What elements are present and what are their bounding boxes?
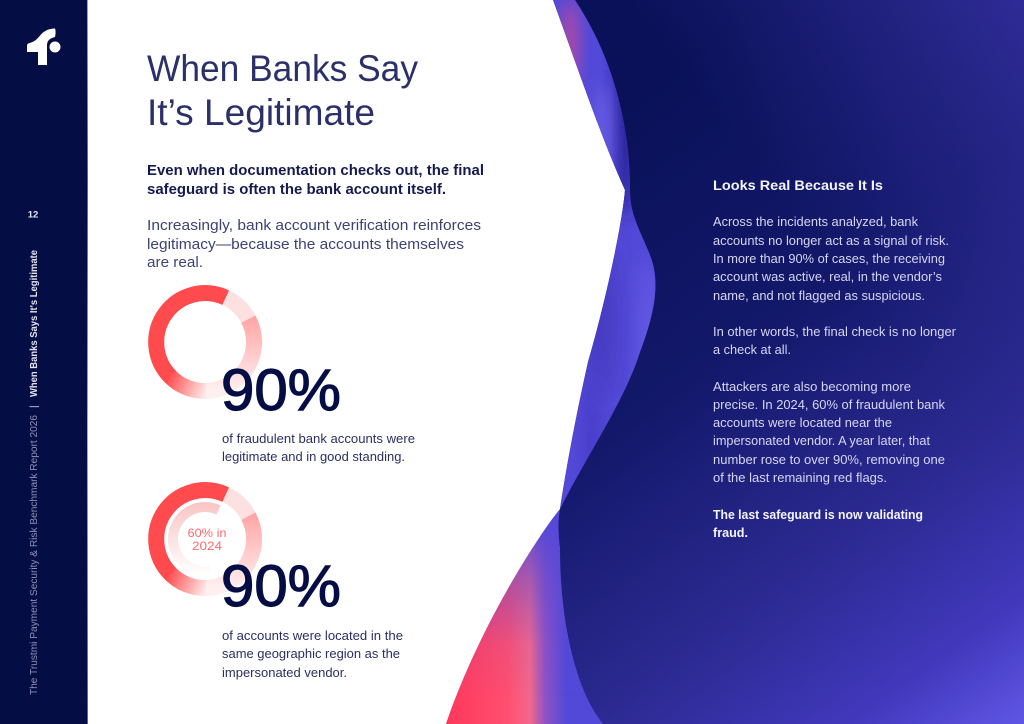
right panel paragraph 3: number rose to over 90%, removing one xyxy=(713,453,945,467)
donut centre label: 60% in xyxy=(188,526,226,540)
title: When Banks Say xyxy=(147,48,418,89)
lead statement: safeguard is often the bank account itself. xyxy=(147,182,446,198)
right panel paragraph 2 xyxy=(713,325,956,357)
right panel conclusion: The last safeguard is now validating xyxy=(713,508,923,522)
title xyxy=(147,48,418,133)
intro paragraph: are real. xyxy=(147,255,203,271)
stat description: of accounts were located in the xyxy=(222,629,403,643)
right panel paragraph 1: name, and not flagged as suspicious. xyxy=(713,289,925,303)
sidebar running title xyxy=(29,250,40,695)
right panel paragraph 3 xyxy=(713,380,946,485)
sidebar running title: The Trustmi Payment Security & Risk Benchmark Report 2026 xyxy=(29,415,40,695)
right panel paragraph 1: accounts no longer act as a signal of risk. xyxy=(713,234,949,248)
right panel paragraph 3: Attackers are also becoming more xyxy=(713,380,911,394)
flowing ribbon wave xyxy=(446,0,656,724)
stat description xyxy=(222,432,415,464)
donut centre label xyxy=(188,526,226,553)
right panel paragraph 1: account was active, real, in the vendor’s xyxy=(713,270,942,284)
panel: sidebar xyxy=(0,0,88,724)
intro paragraph xyxy=(147,218,481,271)
stat description: of fraudulent bank accounts were xyxy=(222,432,415,446)
right panel paragraph 3: precise. In 2024, 60% of fraudulent bank xyxy=(713,398,946,412)
lead statement xyxy=(147,163,484,198)
right panel paragraph 1 xyxy=(713,215,949,303)
intro paragraph: Increasingly, bank account verification reinforces xyxy=(147,218,481,234)
right panel paragraph 3: accounts were located near the xyxy=(713,416,892,430)
sidebar running title: | xyxy=(29,405,40,408)
donut centre label: 2024 xyxy=(192,539,222,553)
white content area xyxy=(88,0,625,724)
stat description xyxy=(222,629,403,680)
sidebar running title: When Banks Says It's Legitimate xyxy=(29,250,40,397)
stat: 90%: 90% xyxy=(221,554,341,619)
right panel paragraph 3: impersonated vendor. A year later, that xyxy=(713,434,931,448)
right panel paragraph 3: of the last remaining red flags. xyxy=(713,471,887,485)
right panel paragraph 1: In more than 90% of cases, the receiving xyxy=(713,252,945,266)
stat: 90%: 90% xyxy=(221,358,341,423)
stat description: same geographic region as the xyxy=(222,647,400,661)
right panel conclusion xyxy=(713,508,923,540)
page number: 12 xyxy=(28,210,38,220)
intro paragraph: legitimacy—because the accounts themselves xyxy=(147,237,464,253)
donut chart: 90% same region, 60% in 2024 xyxy=(156,490,254,588)
right panel conclusion: fraud. xyxy=(713,526,748,540)
lead statement: Even when documentation checks out, the final xyxy=(147,163,484,179)
donut chart: 90% legitimate accounts xyxy=(156,293,254,391)
right panel paragraph 2: a check at all. xyxy=(713,343,791,357)
stat description: legitimate and in good standing. xyxy=(222,450,405,464)
right panel paragraph 1: Across the incidents analyzed, bank xyxy=(713,215,919,229)
right panel heading: Looks Real Because It Is xyxy=(713,178,883,193)
stat description: impersonated vendor. xyxy=(222,666,347,680)
icon: logo xyxy=(27,28,60,65)
title: It’s Legitimate xyxy=(147,92,375,133)
panel: right background xyxy=(540,0,1024,724)
right panel paragraph 2: In other words, the final check is no longer xyxy=(713,325,956,339)
